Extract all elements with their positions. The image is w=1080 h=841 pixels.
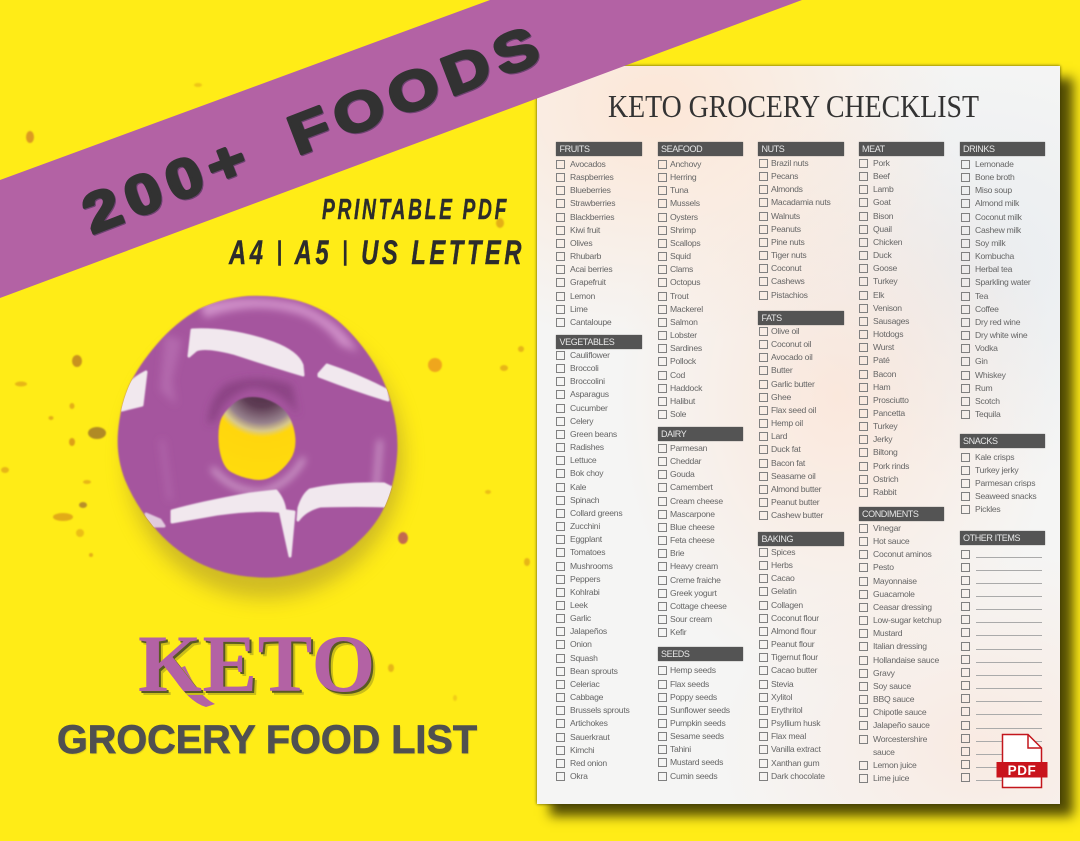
list: fats: Ghee [771,392,791,402]
list: fats [759,326,824,520]
list: vegetables: Zucchini [570,521,600,531]
list: meat: Rabbit [873,487,896,497]
list: vegetables: Broccoli [570,363,599,373]
list: snacks: Parmesan crisps [975,478,1035,488]
list: fats: Duck fat [771,444,801,454]
heading: dairy: DAIRY [661,429,686,439]
list: fats: Flax seed oil [771,405,816,415]
list: nuts: Pistachios [771,290,808,300]
list: seafood: Haddock [670,383,702,393]
heading: dairy [658,427,743,441]
list: drinks: Scotch [975,396,1000,406]
list: vegetables: Squash [570,653,598,663]
list: meat: Paté [873,355,890,365]
list: condiments [859,523,942,783]
list: vegetables: Bean sprouts [570,666,618,676]
icon: pdf file [996,734,1048,788]
list: vegetables: Celeriac [570,679,600,689]
list: fruits: Rhubarb [570,251,601,261]
list: seafood: Oysters [670,212,698,222]
heading: nuts [758,142,844,156]
heading: seafood: SEAFOOD [661,144,702,154]
list: drinks: Vodka [975,343,998,353]
heading: fats: FATS [762,313,782,323]
list: drinks: Tea [975,291,988,301]
list: condiments: Low-sugar ketchup [873,615,941,625]
list: baking: Cacao butter [771,665,817,675]
list: drinks: Soy milk [975,238,1005,248]
list: condiments: BBQ sauce [873,694,914,704]
heading: vegetables [556,335,642,349]
donut hole [218,397,295,480]
list: meat: Venison [873,303,902,313]
list: drinks: Coffee [975,304,999,314]
list: drinks: Herbal tea [975,264,1012,274]
list: fats: Almond butter [771,484,821,494]
list: fruits: Blackberries [570,212,614,222]
list: meat: Ham [873,382,890,392]
list: nuts: Walnuts [771,211,800,221]
list: seeds: Cumin seeds [670,771,717,781]
heading: snacks [960,434,1045,448]
list: dairy: Sour cream [670,614,712,624]
heading: fats [758,311,844,325]
list: baking: Flax meal [771,731,806,741]
list: seafood: Trout [670,291,688,301]
list: vegetables: Kimchi [570,745,594,755]
donut surface shading [160,298,380,500]
list: nuts: Almonds [771,184,803,194]
list: drinks: Lemonade [975,159,1014,169]
list: seeds: Tahini [670,744,691,754]
list: fruits: Lime [570,304,588,314]
list: snacks: Pickles [975,504,1000,514]
list: fats: Coconut oil [771,339,811,349]
list: vegetables: Broccolini [570,376,605,386]
heading: fruits: FRUITS [560,144,590,154]
list: seeds [658,665,730,781]
list: vegetables: Cucumber [570,403,608,413]
checklist title: KETO GROCERY CHECKLIST [608,88,979,124]
donut icing stripes [122,330,392,556]
heading: condiments [858,507,944,521]
list: seafood: Lobster [670,330,697,340]
list: fats: Seasame oil [771,471,816,481]
heading: other items: OTHER ITEMS [963,533,1020,543]
list: fats: Peanut butter [771,497,819,507]
list: drinks: Bone broth [975,172,1015,182]
list: vegetables: Eggplant [570,534,602,544]
list: drinks: Gin [975,356,988,366]
list: snacks: Kale crisps [975,452,1014,462]
list: condiments: Pesto [873,562,894,572]
list: vegetables: Red onion [570,758,607,768]
list: condiments: Hot sauce [873,536,909,546]
list: drinks: Dry white wine [975,330,1027,340]
list: dairy: Cheddar [670,456,701,466]
list: nuts: Peanuts [771,224,801,234]
list: other items blank lines [961,550,1042,782]
list: dairy: Heavy cream [670,561,718,571]
list: vegetables: Asparagus [570,389,609,399]
list: nuts: Cashews [771,276,805,286]
list: nuts: Macadamia nuts [771,197,831,207]
list: fats: Avocado oil [771,352,813,362]
heading: seeds [658,647,743,661]
list: seafood: Salmon [670,317,698,327]
list: meat: Ostrich [873,474,898,484]
list: vegetables: Jalapeños [570,626,607,636]
list: drinks: Cashew milk [975,225,1021,235]
list: drinks: Rum [975,383,992,393]
list: condiments: Coconut aminos [873,549,932,559]
list: seafood: Sole [670,409,686,419]
heading: grocery food list: GROCERY FOOD LIST [57,718,477,762]
list: vegetables: Celery [570,416,593,426]
list: baking: Xylitol [771,692,792,702]
subheading: printable formats [228,194,525,272]
list: seeds: Poppy seeds [670,692,717,702]
heading: meat: MEAT [862,144,885,154]
list: nuts: Pine nuts [771,237,805,247]
list: vegetables: Cabbage [570,692,603,702]
list: seafood: Halibut [670,396,695,406]
list: baking: Dark chocolate [771,771,825,781]
list: seeds: Pumpkin seeds [670,718,726,728]
list: baking: Xanthan gum [771,758,819,768]
list: dairy: Brie [670,548,684,558]
list: meat: Goose [873,263,897,273]
list: meat: Duck [873,250,892,260]
heading: drinks: DRINKS [963,144,995,154]
list: condiments: Ceasar dressing [873,602,932,612]
list: baking: Stevia [771,679,793,689]
list: condiments: Italian dressing [873,641,927,651]
list: fruits: Grapefruit [570,277,606,287]
list: meat: Wurst [873,342,894,352]
list: condiments: Lime juice [873,773,909,783]
list: seafood: Shrimp [670,225,696,235]
list: vegetables: Leek [570,600,588,610]
list: meat [859,158,910,497]
list: drinks: Sparkling water [975,277,1030,287]
heading: snacks: SNACKS [963,436,998,446]
list: meat: Goat [873,197,891,207]
list: meat: Pork [873,158,890,168]
list: fruits: Acai berries [570,264,612,274]
list: nuts: Pecans [771,171,798,181]
list: nuts [759,158,831,300]
list: baking: Gelatin [771,586,796,596]
list: vegetables: Kohlrabi [570,587,600,597]
list: vegetables: Kale [570,482,586,492]
list: meat: Jerky [873,434,892,444]
list: vegetables: Okra [570,771,588,781]
list: dairy: Kefir [670,627,686,637]
list: seafood: Clams [670,264,693,274]
list: condiments: Mayonnaise [873,576,917,586]
list: baking [759,547,825,781]
heading: vegetables: VEGETABLES [560,337,614,347]
list: meat: Pancetta [873,408,905,418]
icon: k swash tail [174,666,215,707]
heading: nuts: NUTS [762,144,784,154]
list: vegetables: Radishes [570,442,604,452]
list: baking: Almond flour [771,626,816,636]
list: drinks: Miso soup [975,185,1012,195]
heading: seeds: SEEDS [661,649,690,659]
list: seeds: Sunflower seeds [670,705,730,715]
list: vegetables: Garlic [570,613,591,623]
list: fruits: Lemon [570,291,595,301]
list: seafood: Herring [670,172,696,182]
list: meat: Lamb [873,184,894,194]
list: vegetables: Green beans [570,429,617,439]
list: seafood: Squid [670,251,691,261]
list: vegetables: Cauliflower [570,350,610,360]
illustration: iced purple donut [116,294,412,608]
list: meat: Turkey [873,421,897,431]
list: fruits: Raspberries [570,172,614,182]
list: seafood: Pollock [670,356,696,366]
list: condiments: sauce [873,747,895,757]
list: snacks [961,452,1036,514]
list: seafood: Octopus [670,277,700,287]
list: dairy: Mascarpone [670,509,715,519]
list: dairy: Feta cheese [670,535,715,545]
list: seeds: Mustard seeds [670,757,723,767]
list: drinks: Dry red wine [975,317,1020,327]
list: seeds: Flax seeds [670,679,709,689]
list: baking: Tigernut flour [771,652,818,662]
heading: seafood [658,142,743,156]
list: meat: Turkey [873,276,897,286]
list: fats: Olive oil [771,326,799,336]
keto word: KETO [138,618,376,709]
list: vegetables: Artichokes [570,718,608,728]
subheading: printable formats: A5 [285,234,342,272]
list: seeds: Hemp seeds [670,665,716,675]
list: vegetables: Onion [570,639,592,649]
list: seafood: Mussels [670,198,700,208]
list: vegetables: Tomatoes [570,547,605,557]
list: baking: Peanut flour [771,639,814,649]
list: dairy: Creme fraiche [670,575,721,585]
list: seafood: Scallops [670,238,700,248]
list: fats: Garlic butter [771,379,815,389]
list: drinks: Almond milk [975,198,1019,208]
list: vegetables [556,350,630,781]
list: fruits: Olives [570,238,592,248]
list: baking: Cacao [771,573,795,583]
list: drinks: Coconut milk [975,212,1022,222]
list: condiments: Guacamole [873,589,915,599]
list: vegetables: Spinach [570,495,599,505]
list: baking: Spices [771,547,795,557]
list: meat: Prosciutto [873,395,909,405]
list: fruits: Cantaloupe [570,317,611,327]
list: dairy [658,443,727,637]
list: vegetables: Collard greens [570,508,622,518]
list: condiments: Soy sauce [873,681,911,691]
list: fats: Cashew butter [771,510,823,520]
list: meat: Biltong [873,447,898,457]
list: condiments: Hollandaise sauce [873,655,939,665]
list: drinks: Kombucha [975,251,1014,261]
heading: meat [858,142,944,156]
list: snacks: Seaweed snacks [975,491,1036,501]
heading: condiments: CONDIMENTS [862,509,918,519]
list: baking: Erythritol [771,705,802,715]
subheading: printable formats: | [277,236,285,266]
list: baking: Vanilla extract [771,744,821,754]
panel: keto grocery checklist [537,66,1060,804]
list: drinks: Tequila [975,409,1000,419]
subheading: printable formats: A4 [229,234,282,272]
list: fruits: Kiwi fruit [570,225,600,235]
list: fats: Bacon fat [771,458,805,468]
list: vegetables: Mushrooms [570,560,613,570]
list: seafood: Mackerel [670,304,703,314]
list: fruits: Avocados [570,159,606,169]
list: baking: Herbs [771,560,793,570]
heading: baking: BAKING [762,534,793,544]
list: seafood [658,159,703,419]
list: nuts: Tiger nuts [771,250,806,260]
list: seafood: Cod [670,370,685,380]
icon: pdf file: PDF [1008,763,1036,778]
list: fats: Hemp oil [771,418,803,428]
list: vegetables: Brussels sprouts [570,705,630,715]
list: seafood: Tuna [670,185,688,195]
list: condiments: Worcestershire [873,734,927,744]
list: meat: Quail [873,224,892,234]
list: meat: Beef [873,171,890,181]
banner: diagonal purple ribbon [0,0,802,298]
list: condiments: Lemon juice [873,760,917,770]
list: seeds: Sesame seeds [670,731,724,741]
list: fruits: Blueberries [570,185,611,195]
list: dairy: Camembert [670,482,713,492]
subheading: printable formats: | [342,236,351,266]
list: baking: Psyllium husk [771,718,820,728]
list: fruits [556,159,616,327]
list: meat: Elk [873,290,884,300]
list: meat: Sausages [873,316,909,326]
list: condiments: Mustard [873,628,902,638]
list: drinks: Whiskey [975,370,1006,380]
list: condiments: Gravy [873,668,895,678]
list: dairy: Parmesan [670,443,707,453]
list: nuts: Coconut [771,263,801,273]
list: condiments: Vinegar [873,523,901,533]
list: snacks: Turkey jerky [975,465,1018,475]
list: meat: Hotdogs [873,329,903,339]
list: dairy: Greek yogurt [670,588,717,598]
list: seafood: Sardines [670,343,702,353]
heading: keto [138,618,376,709]
list: meat: Bacon [873,368,896,378]
list: dairy: Gouda [670,469,695,479]
banner text: 200+ foods: 200+ FOODS [74,12,554,245]
list: vegetables: Sauerkraut [570,732,610,742]
heading: other items [960,531,1045,545]
list: dairy: Cottage cheese [670,601,727,611]
list: meat: Chicken [873,237,902,247]
list: vegetables: Lettuce [570,455,596,465]
list: condiments: Chipotle sauce [873,707,926,717]
list: seafood: Anchovy [670,159,701,169]
list: meat: Pork rinds [873,461,909,471]
list: dairy: Cream cheese [670,496,723,506]
list: baking: Coconut flour [771,613,819,623]
list: nuts: Brazil nuts [771,158,808,168]
list: condiments: Jalapeño sauce [873,720,930,730]
list: dairy: Blue cheese [670,522,715,532]
heading: baking [758,532,844,546]
list: meat: Bison [873,211,893,221]
list: baking: Collagen [771,600,803,610]
list: vegetables: Peppers [570,574,600,584]
list: fats: Butter [771,365,792,375]
heading: fruits [556,142,642,156]
heading: drinks [960,142,1045,156]
list: drinks [961,159,1031,419]
list: fats: Lard [771,431,787,441]
list: vegetables: Bok choy [570,468,603,478]
list: fruits: Strawberries [570,198,615,208]
